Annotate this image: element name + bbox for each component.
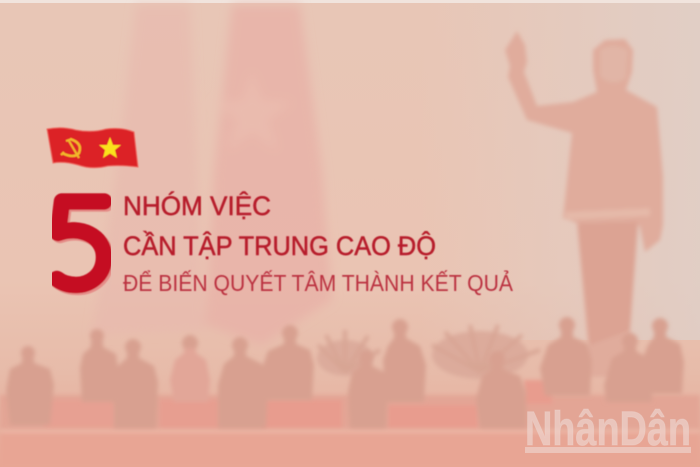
title line 2: CẦN TẬP TRUNG CAO ĐỘ bbox=[123, 230, 436, 261]
background: red flags bbox=[92, 5, 332, 345]
icon: party and national flag bbox=[47, 128, 138, 168]
title line 3: ĐỂ BIẾN QUYẾT TÂM THÀNH KẾT QUẢ bbox=[123, 268, 514, 296]
big numeral 5 bbox=[57, 202, 106, 287]
background: statue bbox=[505, 31, 663, 377]
title line 1: NHÓM VIỆC bbox=[123, 190, 271, 221]
background: podium bbox=[0, 380, 700, 467]
background: audience bbox=[6, 317, 684, 428]
icon: yellow star bbox=[99, 137, 121, 158]
title text bbox=[123, 190, 514, 296]
background: plants bbox=[317, 325, 540, 379]
icon: hammer and sickle bbox=[61, 139, 80, 158]
